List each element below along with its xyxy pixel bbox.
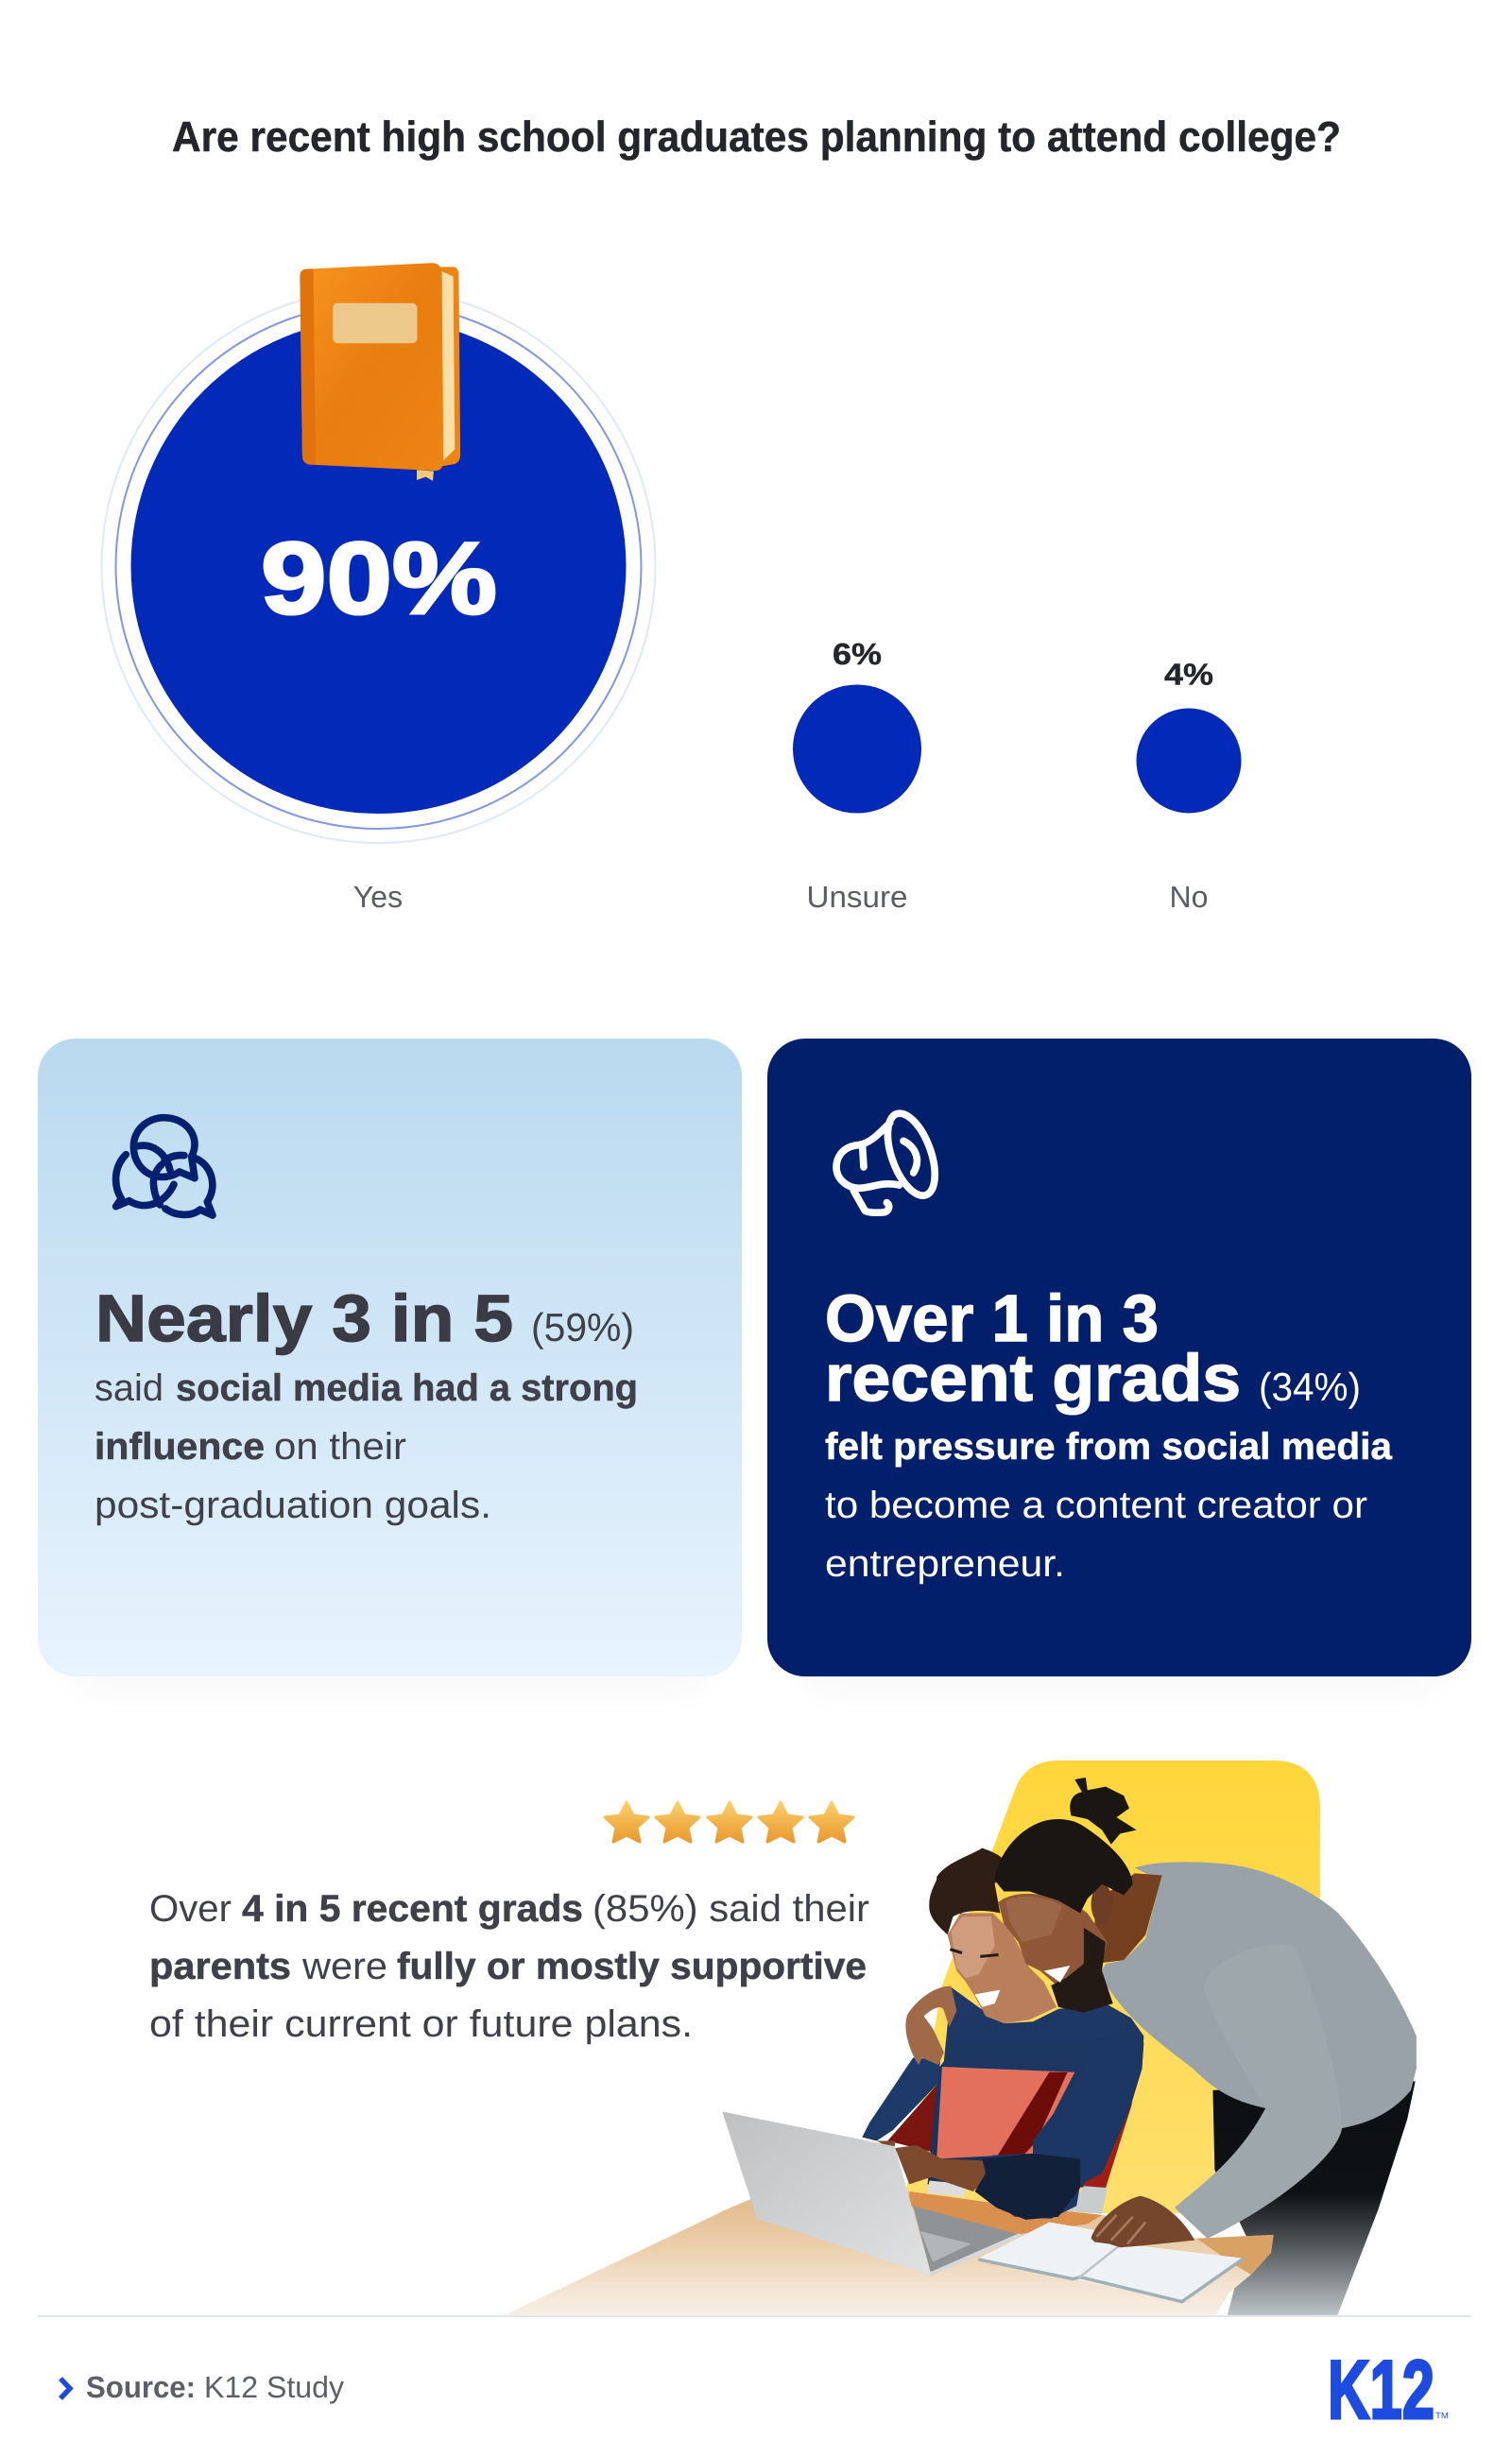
text block: parental support: were — [301, 1946, 387, 1987]
heading: Over 1 in 3 recent grads: Over 1 in 3 — [825, 1281, 1159, 1355]
circle: Unsure 6% — [793, 684, 921, 813]
man's hand on notebook — [1091, 2196, 1194, 2247]
footer: source: K12 Study — [204, 2370, 344, 2404]
text block: parental support: 4 in 5 recent grads — [242, 1888, 583, 1930]
text block: parental support: Over — [149, 1888, 232, 1930]
man's sweater — [1100, 1862, 1417, 2239]
boy's forearm — [975, 2154, 1080, 2220]
footer: source: Source: — [86, 2370, 196, 2404]
text block: to become a content creator or — [825, 1485, 1367, 1526]
boy's sweater — [862, 1987, 1143, 2219]
heading: Over 1 in 3 recent grads: recent grads — [825, 1341, 1241, 1415]
label: 6 percent: 6% — [833, 637, 882, 671]
text block — [94, 1367, 638, 1526]
icon: chevron — [60, 2379, 70, 2398]
label: Unsure: Unsure — [807, 880, 907, 914]
text block: influence — [94, 1426, 265, 1468]
icon: speech bubbles — [116, 1118, 213, 1215]
logo: K12: K12 — [1328, 2343, 1435, 2436]
open notebook — [978, 2223, 1244, 2302]
circle: Yes 90%: 90% — [261, 521, 497, 635]
text block: said — [94, 1367, 163, 1409]
text block: post-graduation goals. — [94, 1485, 491, 1526]
stat: 59%: (59%) — [531, 1305, 634, 1349]
logo: K12: TM — [1435, 2411, 1449, 2420]
chart: proportional circles — [102, 263, 1242, 914]
label: Yes: Yes — [353, 880, 403, 914]
title: Are recent high school graduates planning to attend college? — [172, 112, 1341, 161]
boy's hand — [877, 2140, 986, 2191]
man's hand on shoulder — [905, 1986, 956, 2065]
man's legs — [1212, 2081, 1416, 2315]
icon: orange book — [300, 263, 460, 481]
text block: social media had a strong — [176, 1367, 638, 1409]
panel: social media influence — [38, 1039, 742, 1696]
yellow backdrop — [902, 1761, 1320, 2213]
circle: Yes 90% — [102, 289, 656, 843]
panel: social media pressure — [767, 1039, 1471, 1696]
heading: Nearly 3 in 5: Nearly 3 in 5 — [95, 1281, 513, 1355]
icon: five stars — [605, 1802, 853, 1842]
text block: parental support — [149, 1888, 869, 2045]
text block — [825, 1426, 1393, 1585]
label: 4 percent: 4% — [1164, 658, 1213, 692]
text block: parental support: fully or mostly supportive — [397, 1946, 867, 1987]
heading: Over 1 in 3 recent grads — [825, 1281, 1241, 1415]
icon: megaphone — [836, 1108, 944, 1212]
man's neck — [1094, 1873, 1162, 1964]
footer: source — [60, 2370, 344, 2404]
circle: No 4% — [1136, 709, 1242, 813]
text block: entrepreneur. — [825, 1543, 1065, 1585]
stat: 34%: (34%) — [1259, 1365, 1361, 1409]
text block: parental support: of their current or future plans. — [149, 2003, 693, 2045]
man's head — [995, 1778, 1137, 2013]
text block: parental support: (85%) said their — [593, 1888, 869, 1930]
text block: felt pressure from social media — [825, 1426, 1393, 1468]
boy's head — [929, 1848, 1057, 2023]
text block: parental support: parents — [149, 1946, 291, 1987]
text block: on their — [274, 1426, 406, 1468]
label: No: No — [1170, 880, 1208, 914]
illustration: father and son at a laptop — [503, 1761, 1417, 2316]
table — [503, 2191, 1274, 2316]
laptop — [722, 2111, 1021, 2276]
